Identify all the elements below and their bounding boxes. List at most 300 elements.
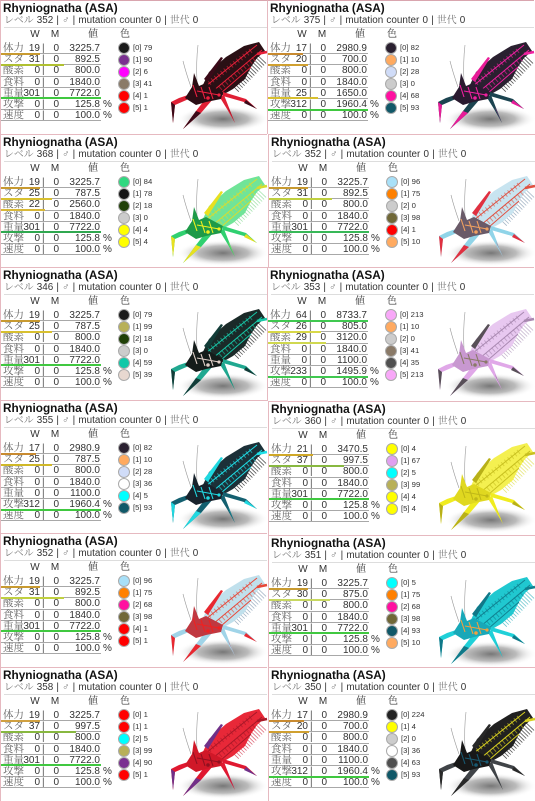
stats table: 0 <box>53 310 59 321</box>
stats table: 0 <box>34 465 40 476</box>
stats table: | <box>310 612 313 623</box>
stats table: 0 <box>320 355 326 366</box>
colour swatches: [1] 67 <box>401 456 420 465</box>
stats table: 0 <box>302 600 308 611</box>
stats table: 100.0 <box>343 645 368 656</box>
stats table: % <box>371 500 380 511</box>
subtitle: レベル 352 | ♂ | mutation counter 0 | 世代 0 <box>272 149 466 160</box>
stats table: 攻撃 <box>270 98 291 110</box>
colour swatches: [4] 1 <box>133 91 148 100</box>
stats table: 攻撃 <box>3 98 24 110</box>
subtitle: レベル 375 | ♂ | mutation counter 0 | 世代 0 <box>271 15 465 26</box>
stat column headers: 色 <box>120 429 130 440</box>
colour swatches: [5] 1 <box>133 636 148 645</box>
stats table: 0 <box>34 643 40 654</box>
stats table: 997.5 <box>343 455 368 466</box>
stats table <box>269 710 379 788</box>
colour swatches: [2] 28 <box>400 67 419 76</box>
stats table: | <box>42 755 45 766</box>
stats table: 0 <box>53 344 59 355</box>
card: level 352 blue, red and orange <box>0 533 267 667</box>
stats table: | <box>42 454 45 465</box>
card: level 351 cyan <box>268 535 535 669</box>
stat column headers <box>1 696 141 708</box>
stats table: 重量 <box>3 87 24 99</box>
stats table <box>269 176 380 255</box>
stats table: 0 <box>53 488 59 499</box>
stats table: 体力 <box>3 442 24 454</box>
stats table: 速度 <box>270 376 291 388</box>
stats table: 0 <box>34 65 40 76</box>
stats table: | <box>310 211 313 222</box>
stats table: 0 <box>301 355 307 366</box>
stats table: | <box>42 77 45 88</box>
stat column headers: M <box>51 429 59 440</box>
subtitle: レベル 351 | ♂ | mutation counter 0 | 世代 0 <box>272 550 466 561</box>
stats table: 21 <box>297 444 308 455</box>
stats table: 1840.0 <box>337 478 368 489</box>
stats table: 食料 <box>3 343 24 355</box>
stats table: 0 <box>53 454 59 465</box>
stats table: 食料 <box>271 477 292 489</box>
stats table: % <box>370 377 379 388</box>
stats table: 0 <box>301 77 307 88</box>
title: Rhyniognatha (ASA) <box>271 536 386 550</box>
stats table: 787.5 <box>75 321 100 332</box>
stats table: 19 <box>297 578 308 589</box>
colour swatches <box>386 709 426 783</box>
stats table <box>1 442 112 521</box>
stats table: 2980.9 <box>69 443 100 454</box>
stats table: | <box>42 65 45 76</box>
card: level 355 dark and cyan <box>0 400 267 534</box>
subtitle <box>4 547 267 561</box>
stats table: 312 <box>291 766 308 777</box>
stats table: 0 <box>321 623 327 634</box>
stats table: 17 <box>29 443 40 454</box>
stats table: 1840.0 <box>69 744 100 755</box>
stats table <box>1 42 112 121</box>
stats table: 0 <box>302 244 308 255</box>
subtitle <box>272 549 535 563</box>
stats table: | <box>310 466 313 477</box>
colour swatches: [5] 93 <box>133 503 152 512</box>
title: Rhyniognatha (ASA) <box>3 1 118 15</box>
stats table: 0 <box>302 478 308 489</box>
stats table: 7722.0 <box>69 88 100 99</box>
stats table: 0 <box>320 77 326 88</box>
card: level 350 black and yellow <box>268 667 535 801</box>
stats table: 1840.0 <box>337 211 368 222</box>
stats table: % <box>103 499 112 510</box>
stats table: 食料 <box>271 210 292 222</box>
stats table: 速度 <box>271 644 292 656</box>
stats table: | <box>310 478 313 489</box>
stats table: 0 <box>301 344 307 355</box>
stats table: 0 <box>34 233 40 244</box>
colour swatches: [5] 39 <box>133 370 152 379</box>
title: Rhyniognatha (ASA) <box>3 268 118 282</box>
title: Rhyniognatha (ASA) <box>3 401 118 415</box>
stats table: 0 <box>53 576 59 587</box>
subtitle: レベル 350 | ♂ | mutation counter 0 | 世代 0 <box>272 682 466 693</box>
stats table: | <box>310 199 313 210</box>
stats table: 0 <box>53 766 59 777</box>
stats table: 酸素 <box>271 465 292 477</box>
stats table: 0 <box>320 377 326 388</box>
stats table: 2560.0 <box>69 199 100 210</box>
stats table: 100.0 <box>342 377 367 388</box>
stats table: 0 <box>301 65 307 76</box>
creature illustration <box>171 42 267 130</box>
stats table: 攻撃 <box>270 365 291 377</box>
stats table: | <box>310 578 313 589</box>
stat column headers <box>298 429 398 441</box>
colour swatches: [4] 59 <box>133 358 152 367</box>
stats table: 100.0 <box>342 110 367 121</box>
colour swatches: [2] 0 <box>400 334 415 343</box>
stats table: 0 <box>302 645 308 656</box>
stats table: | <box>309 321 312 332</box>
subtitle: レベル 353 | ♂ | mutation counter 0 | 世代 0 <box>271 282 465 293</box>
stat column headers: M <box>51 696 59 707</box>
stat column headers: W <box>298 430 308 441</box>
colour swatches: [3] 99 <box>401 480 420 489</box>
title: Rhyniognatha (ASA) <box>271 668 386 682</box>
stats table: 1840.0 <box>69 477 100 488</box>
stats table: 800.0 <box>75 332 100 343</box>
stat column headers: W <box>30 429 40 440</box>
stats table: % <box>371 511 380 522</box>
stats table: 0 <box>321 455 327 466</box>
stats table: 速度 <box>270 109 291 121</box>
stats table: 体力 <box>3 575 24 587</box>
stats table: 805.0 <box>342 321 367 332</box>
stats table: 0 <box>321 710 327 721</box>
stats table: 0 <box>321 500 327 511</box>
stats table: | <box>310 489 313 500</box>
title: Rhyniognatha (ASA) <box>3 668 118 682</box>
stats table: | <box>42 222 45 233</box>
stats table: スタ <box>270 53 291 65</box>
colour swatches: [1] 10 <box>400 55 419 64</box>
colour swatches: [0] 79 <box>133 43 152 52</box>
stats table: 体力 <box>271 577 292 589</box>
stats table: 0 <box>321 645 327 656</box>
stats table: | <box>42 443 45 454</box>
stats table: 体力 <box>3 709 24 721</box>
stats table: 100.0 <box>343 244 368 255</box>
stat column headers <box>30 561 130 573</box>
stats table: 301 <box>23 355 40 366</box>
stats table: 体力 <box>3 309 24 321</box>
stats table: 重量 <box>3 620 24 632</box>
stats table: 100.0 <box>343 777 368 788</box>
stats table: 800.0 <box>343 466 368 477</box>
stats table: 0 <box>301 110 307 121</box>
stats table: 0 <box>34 244 40 255</box>
stats table: 速度 <box>3 109 24 121</box>
colour swatches: [2] 0 <box>401 201 416 210</box>
stats table: 125.8 <box>343 500 368 511</box>
stats table: 0 <box>34 510 40 521</box>
stats table: 301 <box>291 489 308 500</box>
stats table: | <box>310 600 313 611</box>
stats table: 800.0 <box>75 598 100 609</box>
stats table: 64 <box>296 310 307 321</box>
stats table: 31 <box>29 587 40 598</box>
stats table: | <box>42 355 45 366</box>
card: level 358 red and purple <box>0 667 267 801</box>
stats table: 301 <box>23 755 40 766</box>
stats table: 0 <box>302 199 308 210</box>
stats table: 0 <box>53 443 59 454</box>
colour swatches: [2] 28 <box>133 467 152 476</box>
subtitle <box>271 281 534 295</box>
stats table: | <box>42 233 45 244</box>
stats table: 0 <box>53 332 59 343</box>
stats table: % <box>370 110 379 121</box>
stats table: 体力 <box>270 42 291 54</box>
subtitle <box>4 681 267 695</box>
subtitle: レベル 360 | ♂ | mutation counter 0 | 世代 0 <box>272 416 466 427</box>
stats table: 0 <box>302 634 308 645</box>
stat column headers: W <box>30 163 40 174</box>
stats table: 重量 <box>3 354 24 366</box>
stats table: 0 <box>321 244 327 255</box>
stats table: 800.0 <box>75 465 100 476</box>
stats table: | <box>310 511 313 522</box>
stats table: 787.5 <box>75 188 100 199</box>
stats table: % <box>371 777 380 788</box>
colour swatches: [4] 1 <box>401 225 416 234</box>
stats table: 0 <box>302 211 308 222</box>
stat column headers: M <box>318 296 326 307</box>
stats table: | <box>310 589 313 600</box>
stat column headers: M <box>51 296 59 307</box>
stat column headers: W <box>30 562 40 573</box>
stats table: 0 <box>320 54 326 65</box>
stats table: 22 <box>29 199 40 210</box>
stats table: | <box>42 244 45 255</box>
stats table: | <box>42 777 45 788</box>
stats table: 0 <box>34 477 40 488</box>
stats table: | <box>309 310 312 321</box>
stats table: 0 <box>321 732 327 743</box>
stats table: 0 <box>320 310 326 321</box>
stats table: | <box>42 99 45 110</box>
stats table: 800.0 <box>342 65 367 76</box>
colour swatches <box>386 443 420 515</box>
stats table: 3225.7 <box>69 177 100 188</box>
colour swatches: [5] 10 <box>401 638 420 647</box>
stats table: 0 <box>53 199 59 210</box>
stats table: | <box>42 643 45 654</box>
stats table: 0 <box>302 500 308 511</box>
colour swatches: [0] 96 <box>401 177 420 186</box>
stat column headers: 色 <box>120 562 130 573</box>
stat column headers: W <box>30 296 40 307</box>
stats table <box>268 309 379 388</box>
title: Rhyniognatha (ASA) <box>3 135 118 149</box>
stats table: 1840.0 <box>69 77 100 88</box>
stats table: | <box>42 488 45 499</box>
stats table: 25 <box>296 88 307 99</box>
stats table: 100.0 <box>75 643 100 654</box>
stats table: 0 <box>321 744 327 755</box>
stats table: 0 <box>321 612 327 623</box>
colour swatches: [1] 1 <box>133 722 148 731</box>
stats table: | <box>42 54 45 65</box>
stats table: 酸素 <box>3 331 24 343</box>
stats table: スタ <box>3 320 24 332</box>
creature illustration <box>171 442 268 530</box>
stats table: 997.5 <box>75 721 100 732</box>
colour swatches: [2] 68 <box>133 600 152 609</box>
stats table: 3225.7 <box>337 177 368 188</box>
stats table: 875.0 <box>343 589 368 600</box>
colour swatches: [2] 68 <box>401 602 420 611</box>
stats table: % <box>370 366 379 377</box>
stats table: 速度 <box>3 642 24 654</box>
stats table: 125.8 <box>75 99 100 110</box>
stats table: 30 <box>297 589 308 600</box>
stat column headers: M <box>319 564 327 575</box>
stat column headers: 値 <box>356 430 366 441</box>
creature illustration <box>171 575 268 663</box>
stat column headers: M <box>51 163 59 174</box>
stat column headers: 色 <box>388 696 398 707</box>
stat column headers: 色 <box>120 29 130 40</box>
subtitle <box>272 148 535 162</box>
colour swatches: [3] 0 <box>133 213 148 222</box>
stats table: 食料 <box>3 476 24 488</box>
stats table: | <box>310 766 313 777</box>
subtitle <box>4 281 267 295</box>
stats table: | <box>310 744 313 755</box>
stats table: | <box>309 377 312 388</box>
stats table: | <box>42 465 45 476</box>
stats table: 1960.4 <box>336 99 367 110</box>
subtitle: レベル 352 | ♂ | mutation counter 0 | 世代 0 <box>4 15 198 26</box>
stats table: 233 <box>290 366 307 377</box>
stats table: 攻撃 <box>271 499 292 511</box>
stats table: 重量 <box>3 487 24 499</box>
stats table: 0 <box>302 744 308 755</box>
stats table: % <box>371 233 380 244</box>
stats table: 1840.0 <box>69 344 100 355</box>
stats table: 0 <box>53 321 59 332</box>
card: level 352 black and red <box>0 0 267 134</box>
subtitle: レベル 352 | ♂ | mutation counter 0 | 世代 0 <box>4 548 198 559</box>
colour swatches: [0] 213 <box>400 310 424 319</box>
card: level 353 lilac <box>267 267 534 401</box>
stats table: 0 <box>53 587 59 598</box>
stats table: 100.0 <box>75 110 100 121</box>
stats table: 0 <box>321 466 327 477</box>
stats table: 37 <box>29 721 40 732</box>
stats table: | <box>42 199 45 210</box>
stats table: 100.0 <box>75 777 100 788</box>
colour swatches: [4] 68 <box>400 91 419 100</box>
stats table: スタ <box>3 53 24 65</box>
stats table: スタ <box>3 187 24 199</box>
colour swatches: [3] 0 <box>400 79 415 88</box>
stat column headers: M <box>51 29 59 40</box>
colour swatches: [3] 98 <box>401 614 420 623</box>
colour swatches <box>118 309 152 381</box>
stats table: 0 <box>321 777 327 788</box>
stats table: | <box>42 744 45 755</box>
stats table: | <box>42 344 45 355</box>
colour swatches: [0] 96 <box>133 576 152 585</box>
stats table: 酸素 <box>3 597 24 609</box>
stats table: | <box>42 621 45 632</box>
stats table: 29 <box>296 332 307 343</box>
colour swatches <box>385 309 424 381</box>
stats table: 1100.0 <box>70 488 100 499</box>
card: level 360 yellow <box>268 401 535 535</box>
stats table: 0 <box>321 578 327 589</box>
stats table: 125.8 <box>343 233 368 244</box>
stat column headers: M <box>319 696 327 707</box>
stat column headers: M <box>319 430 327 441</box>
stats table: 8733.7 <box>336 310 367 321</box>
stats table: | <box>42 477 45 488</box>
colour swatches: [1] 90 <box>133 55 152 64</box>
stats table: 125.8 <box>75 233 100 244</box>
stat column headers: 値 <box>88 429 98 440</box>
colour swatches: [2] 5 <box>401 468 416 477</box>
card: level 352 pale blue and red <box>268 134 535 268</box>
stats table: 0 <box>320 43 326 54</box>
stat column headers: 値 <box>88 296 98 307</box>
colour swatches: [0] 5 <box>401 578 416 587</box>
stats table: 速度 <box>271 243 292 255</box>
stats table: 酸素 <box>271 731 292 743</box>
stats table: 0 <box>320 65 326 76</box>
stats table: % <box>103 766 112 777</box>
stats table: 速度 <box>3 776 24 788</box>
stats table: | <box>309 355 312 366</box>
stat column headers <box>30 162 130 174</box>
stats table: | <box>309 65 312 76</box>
stats table: | <box>42 499 45 510</box>
stats table: 0 <box>321 199 327 210</box>
stats table: 0 <box>53 621 59 632</box>
stats table: 1840.0 <box>337 612 368 623</box>
stats table: 攻撃 <box>271 765 292 777</box>
stats table: 0 <box>53 177 59 188</box>
stats table: 800.0 <box>75 65 100 76</box>
stats table: 1840.0 <box>337 744 368 755</box>
stats table <box>268 42 379 121</box>
colour swatches: [0] 79 <box>133 310 152 319</box>
stats table: 0 <box>53 188 59 199</box>
stats table: | <box>42 598 45 609</box>
stats table: 速度 <box>3 243 24 255</box>
colour swatches: [4] 4 <box>401 492 416 501</box>
stats table: | <box>310 233 313 244</box>
stats table: 125.8 <box>343 634 368 645</box>
colour swatches: [0] 82 <box>400 43 419 52</box>
subtitle <box>4 414 267 428</box>
stats table: | <box>309 332 312 343</box>
stats table: 食料 <box>3 210 24 222</box>
stats table: 重量 <box>271 488 292 500</box>
stats table: | <box>309 344 312 355</box>
colour swatches: [3] 0 <box>133 346 148 355</box>
